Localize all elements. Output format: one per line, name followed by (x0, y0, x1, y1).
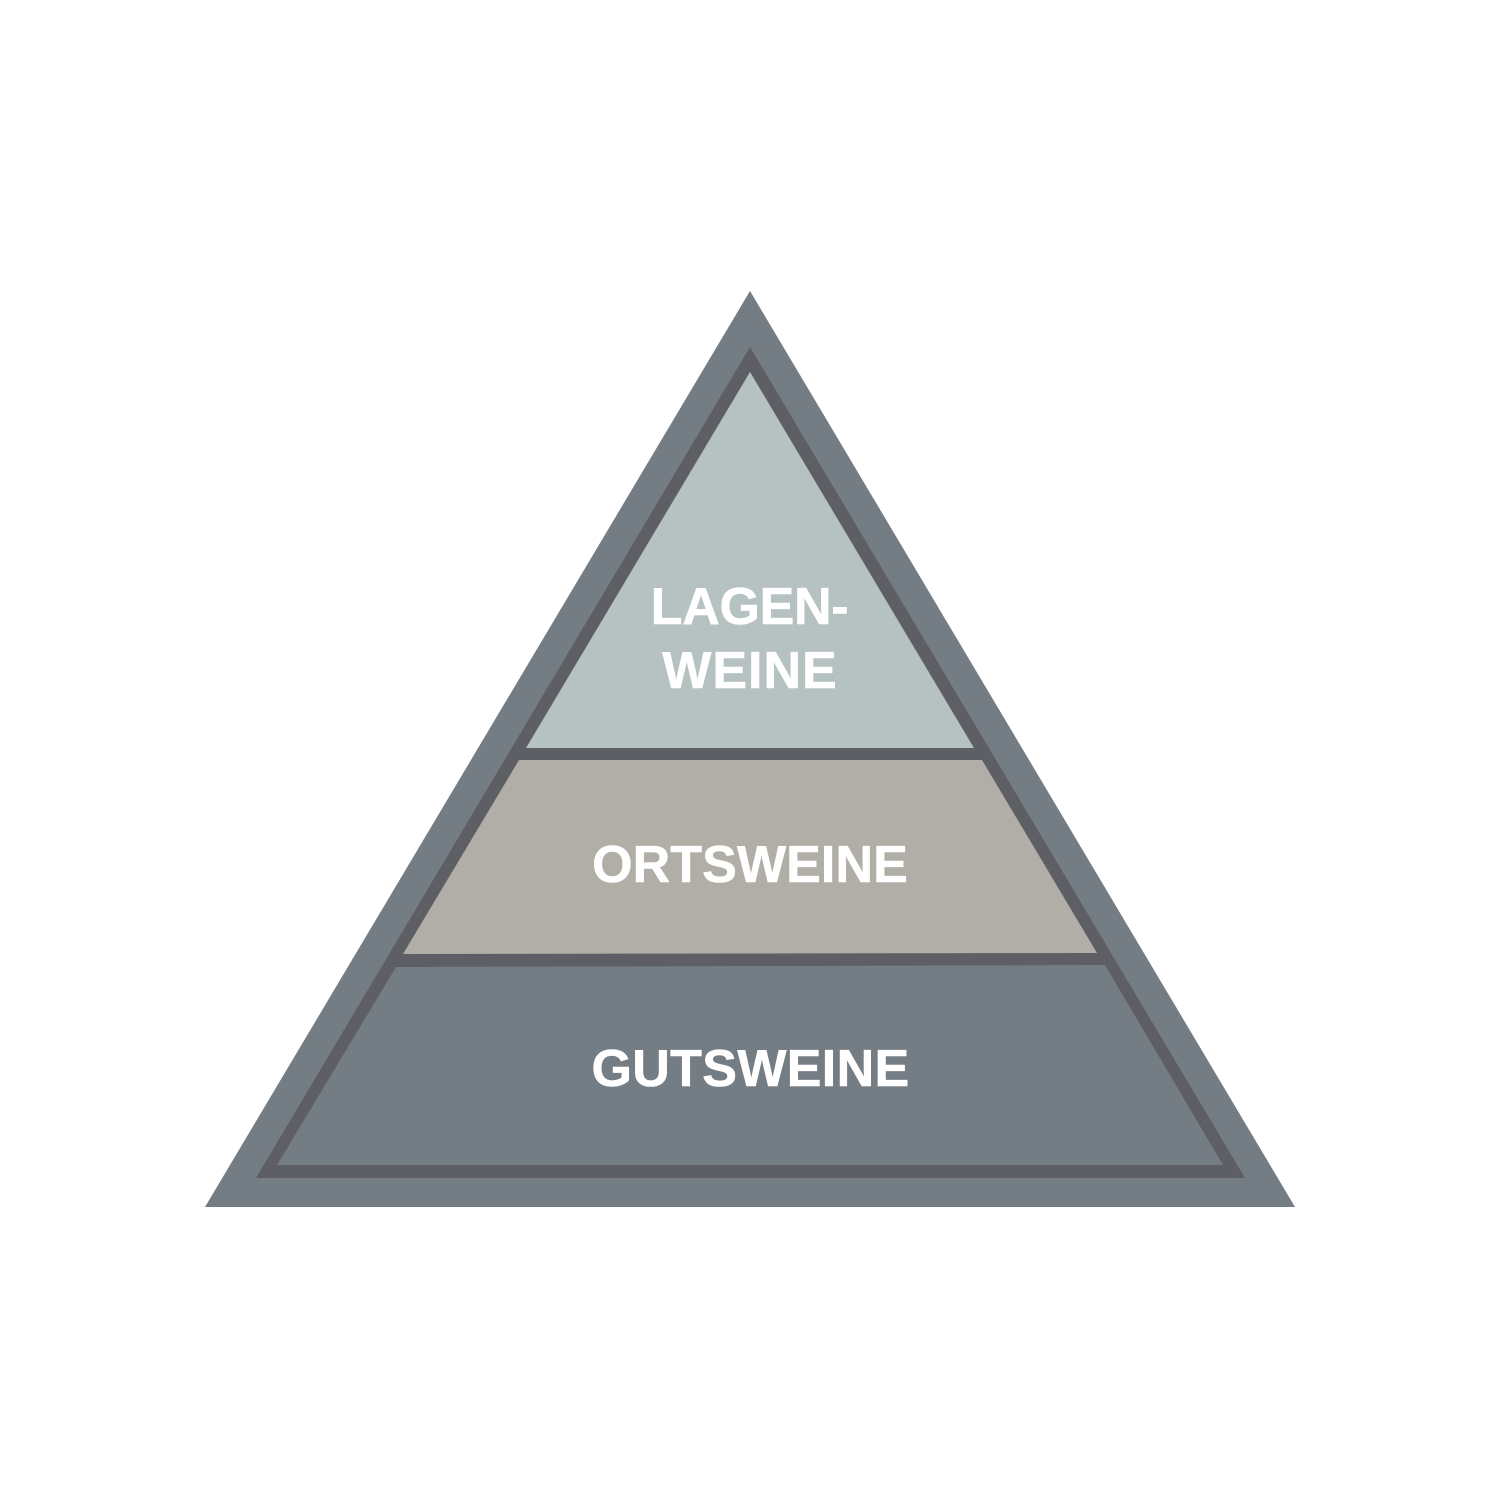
label: Lagenweine: LAGEN- (651, 578, 848, 636)
pyramid (205, 291, 1295, 1207)
label: Ortsweine: ORTSWEINE (592, 836, 908, 894)
tier: Gutsweine (277, 965, 1223, 1165)
label: Gutsweine: GUTSWEINE (591, 1040, 910, 1098)
pyramid outer frame (205, 291, 1295, 1207)
tier: Lagenweine (526, 372, 974, 748)
tier: Lagenweine: WEINE (662, 642, 838, 700)
tier: Ortsweine (403, 760, 1097, 954)
pyramid inner border (256, 347, 1245, 1178)
